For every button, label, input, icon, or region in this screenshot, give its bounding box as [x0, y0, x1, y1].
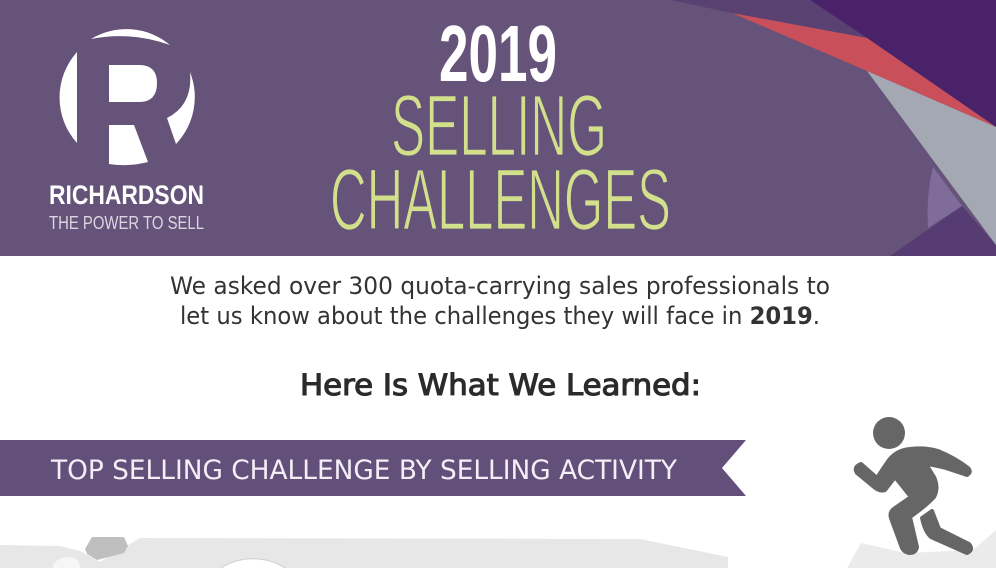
logo tagline: THE POWER TO SELL [49, 213, 204, 233]
rock [85, 537, 128, 560]
illustration: mountain terrain [0, 530, 996, 568]
banner text: TOP SELLING CHALLENGE BY SELLING ACTIVITY [50, 455, 677, 486]
white circle [221, 559, 285, 568]
logo wordmark: RICHARDSON [49, 180, 204, 210]
heading: here is what we learned: Here Is What We Learned: [300, 368, 701, 402]
icon: R roundel [60, 29, 195, 165]
title [330, 9, 671, 248]
title: challenges: CHALLENGES [330, 152, 671, 248]
header panel [0, 0, 996, 256]
section banner [0, 440, 746, 496]
intro text [170, 272, 830, 330]
icon: running person [856, 417, 971, 553]
intro text: let us know about the challenges they will face in 2019. [180, 302, 820, 330]
intro text: We asked over 300 quota-carrying sales professionals to [170, 272, 830, 300]
title: selling: SELLING [391, 78, 607, 174]
title: year: 2019 [439, 9, 557, 98]
logo: Richardson [49, 29, 204, 233]
